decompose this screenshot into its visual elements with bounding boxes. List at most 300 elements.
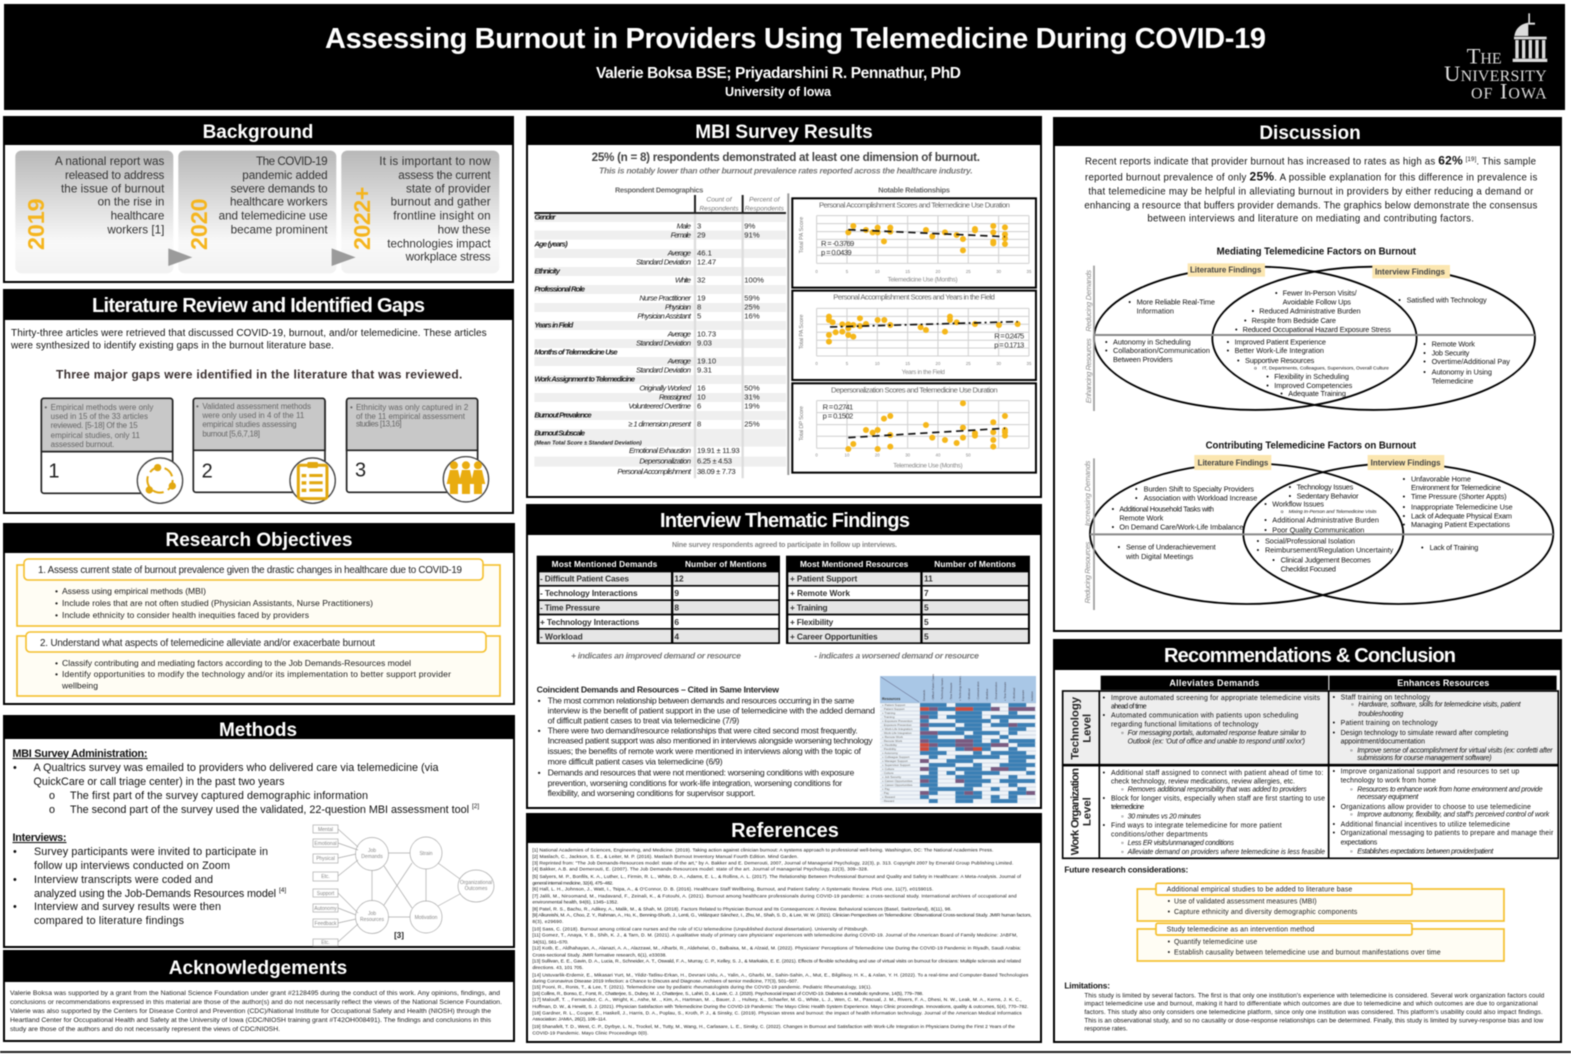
objective 2: Identify opportunities to modify the technology and/or its implementation to better support provider: [62, 669, 451, 679]
gap card 1: assessed burnout.: [51, 440, 114, 449]
venn items: Telemedicine: [1432, 376, 1473, 385]
step: 2022+: 2022+: [349, 187, 375, 250]
logo: University of Iowa: University: [1444, 61, 1547, 86]
table: respondent demographics: 9.03: [697, 339, 712, 348]
objective 2: 2. Understand what aspects of telemedicine alleviate and/or exacerbate burnout: [40, 638, 375, 649]
table: respondent demographics: Average: [667, 249, 691, 258]
heat map: demands by resources: + Work-Life Integration: [882, 727, 913, 731]
recommendations: work organization, enhances resources: Establishes expectations between provider/patient: [1357, 848, 1494, 855]
table: respondent demographics: 59%: [744, 294, 760, 303]
heat map: demands by resources: - Patient Support: [882, 707, 905, 711]
recommendations: technology, enhances resources: •: [1333, 694, 1336, 701]
table: respondent demographics: 8: [697, 303, 701, 312]
panel: recommendations and conclusion: [1054, 640, 1561, 1042]
MBI survey administration: o: [49, 804, 55, 816]
recommendations: work organization, enhances resources: Resources to enhance work from home environment and provide: [1357, 787, 1543, 794]
callout: study telemedicine as intervention: Study telemedicine as an intervention method: [1167, 927, 1314, 934]
table: most mentioned demands: - Technology Interactions: [540, 588, 638, 598]
coincident demands and resources text: interview is the benefit of patient support in the use of telemedicine with the added demand: [548, 705, 875, 715]
table: respondent demographics: Work Assignment to Telemedicine: [534, 375, 636, 384]
row label: work organization level: Work Organization: [1070, 768, 1082, 855]
literature text: Three major gaps were identified in the literature that was reviewed.: [56, 367, 462, 381]
step: 2022+: technologies impact: [387, 237, 491, 250]
table: respondent demographics: 9.31: [697, 366, 712, 375]
limitations: impact telemedicine use and burnout, making it hard to differentiate which outcomes are due to telemedicine and which outcomes are due to organizational: [1084, 1001, 1538, 1008]
diagram: job demands-resources model: Feedback: [315, 921, 337, 927]
icon: cycle: [137, 458, 183, 503]
table: most mentioned demands: - Difficult Patient Cases: [540, 574, 629, 584]
table: respondent demographics: [533, 186, 950, 478]
recommendations: technology, alleviates demands: •: [1103, 712, 1106, 719]
recommendations: work organization, alleviates demands: telemedicine: [1111, 804, 1144, 811]
discussion text: [1084, 153, 1537, 225]
table: respondent demographics: 25%: [744, 303, 760, 312]
heading: MBI survey results: MBI Survey Results: [695, 122, 873, 143]
venn items: Clinical Judgement Becomes: [1281, 556, 1371, 565]
recommendations: work organization, alleviates demands: conditions/other departments: [1111, 832, 1208, 839]
recommendations: work organization, enhances resources: [1333, 768, 1554, 855]
recommendations: technology, alleviates demands: •: [1103, 695, 1106, 702]
venn items: Fewer In-Person Visits/: [1283, 288, 1358, 297]
recommendations: work organization, alleviates demands: •: [1103, 796, 1106, 803]
heat map: demands by resources: + Exposure Prevention: [882, 719, 913, 723]
interviews: •: [13, 901, 17, 913]
venn items: o: [1254, 365, 1257, 371]
reference list: COVID-19 Pandemic. Mayo Clinic Proceedings 0(0).: [532, 1030, 648, 1036]
callout: study telemedicine as intervention: •: [1168, 949, 1171, 956]
table: respondent demographics: 50%: [744, 384, 760, 393]
step: 2019: the issue of burnout: [61, 183, 165, 196]
panel: acknowledgements: [4, 951, 514, 1041]
row label: technology level: Level: [1082, 714, 1094, 743]
interviews: Interview and survey results were then: [34, 901, 221, 913]
diagram: job demands-resources model: Job: [368, 848, 376, 854]
chart: depersonalization vs telemedicine duration: Depersonalization Scores and Telemedicine Use Duration: [831, 385, 998, 394]
table: respondent demographics: Male: [677, 221, 691, 230]
interviews: Interviews:: [12, 832, 66, 844]
table: most mentioned demands: [537, 556, 780, 644]
diagram: job demands-resources model: Support: [317, 891, 335, 897]
recommendations: technology, enhances resources: Staff training on technology: [1341, 694, 1430, 701]
coincident demands and resources text: [537, 685, 875, 798]
discussion text: reported burnout prevalence of only 25%. A possible explanation for this difference in prevalence is: [1085, 170, 1537, 184]
discussion text: that telemedicine may be helpful in alleviating burnout in providers by either reducing a demand or: [1088, 186, 1534, 197]
venn items: with Digital Meetings: [1125, 552, 1194, 561]
heading: discussion: Discussion: [1259, 123, 1361, 144]
venn items: Mixing In-Person and Telemedicine Visits: [1289, 509, 1377, 515]
reference list: [11] Gomez, T., Anaya, Y. B., Shih, K. J., & Tarn, D. M. (2021). A qualitative study of primary care physicians' experiences with telemedicine during COVID-19. Journal of the American Board of Family Medicine: JABFM,: [532, 933, 1018, 939]
venn items: •: [1237, 356, 1240, 365]
venn items: •: [1423, 339, 1426, 348]
chart: personal accomplishment vs years in field: 5: [846, 361, 849, 366]
step: 2022+: workplace stress: [405, 250, 491, 263]
panel: references: [527, 814, 1041, 1042]
venn items: •: [1112, 522, 1115, 531]
callout: additional empirical studies: •: [1168, 898, 1171, 905]
timeline steps: [15, 151, 499, 273]
heat map: demands by resources: + Flexibility: [882, 743, 897, 747]
venn items: [1105, 288, 1510, 398]
table: most mentioned resources: Number of Mentions: [934, 559, 1016, 569]
venn items: •: [1105, 337, 1108, 346]
heat map: demands by resources: - Flexibility: [882, 747, 897, 751]
venn items: Technology Issues: [1297, 482, 1354, 491]
heat map: demands by resources: + Career Opportunities: [882, 779, 913, 783]
venn items: •: [1257, 545, 1260, 554]
recommendations: work organization, alleviates demands: Block for longer visits, especially when staff are first starting to use: [1111, 796, 1325, 803]
discussion text: . This sample: [1476, 156, 1536, 167]
discussion text: between interviews and literature on mediating and contributing factors.: [1147, 214, 1474, 225]
legend notes: - indicates a worsened demand or resource: [814, 650, 979, 660]
step: 2019: on the rise in: [98, 196, 164, 209]
recommendations: technology, alleviates demands: ahead of time: [1111, 703, 1147, 710]
chart: depersonalization vs telemedicine duration: 20: [875, 453, 880, 458]
heat map: demands by resources: + Career Opportunities: [882, 783, 913, 787]
literature text: [10, 328, 487, 381]
reference list: 34(S1), S61–S70.: [532, 939, 568, 945]
table: most mentioned resources: + Remote Work: [790, 588, 850, 598]
venn items: Improved Patient Experience: [1235, 337, 1326, 346]
panel: methods: [4, 716, 514, 947]
recommendations table: Enhances Resources: [1397, 678, 1489, 688]
table: respondent demographics: Personal Accomplishment: [617, 467, 692, 476]
MBI survey administration: A Qualtrics survey was emailed to providers who delivered care via telemedicine (via: [34, 762, 438, 774]
panel: interview thematic findings: [527, 505, 1041, 808]
icon: people: [443, 457, 489, 502]
step: 2019: [23, 155, 165, 250]
heading: references: References: [731, 820, 839, 842]
row label: work organization level: Level: [1082, 797, 1094, 826]
MBI survey administration: o: [49, 790, 55, 802]
table: respondent demographics: Gender: [534, 212, 557, 221]
table: respondent demographics: 46.1: [697, 249, 712, 258]
venn items: Respite from Bedside Care: [1252, 316, 1336, 325]
venn items: •: [1266, 381, 1269, 390]
objective 1: •: [55, 610, 58, 620]
reference list: Association: JAMIA, 26(2), 106–114.: [532, 1017, 607, 1023]
venn items: IT, Departments, Colleagues, Supervisors, Overall Culture: [1262, 365, 1389, 371]
table: most mentioned resources: 11: [924, 574, 933, 584]
table: most mentioned resources: 5: [924, 631, 929, 641]
recommendations: work organization, enhances resources: ▫: [1350, 848, 1352, 855]
step: 2020: and telemedicine use: [219, 210, 328, 223]
reference list: [15] Pooni, R., Ronis, T., & Lee, T. (2021). Telemedicine use by pediatric rheumatologists during the COVID-19 pandemic. Pediatric Rheumatology, 19(1).: [532, 985, 872, 991]
reference list: [17] Malouff, T. ., Fernandez, C. A., Wright, K., Ashe, M. ., Kim, A., Hartman, M. ., Bauer, J. ., Hulsey, K., Schaefer, M. G., White, L. J., Wen, C. M., Pascual, J. M., Rivers, F. A., Dhesi, N. W., Leak, M. A., Kerns, J. K. C.,: [532, 997, 1022, 1003]
venn items: •: [1423, 348, 1426, 357]
chart: depersonalization vs telemedicine duration: 30: [905, 453, 911, 458]
venn items: Lack of Training: [1430, 543, 1478, 552]
heading: interview thematic findings: Interview Thematic Findings: [660, 510, 910, 532]
heading: research objectives: Research Objectives: [166, 530, 352, 551]
heat map: demands by resources: + Manager Support: [882, 759, 908, 763]
table: respondent demographics: 19.10: [697, 357, 716, 366]
venn items: •: [1403, 502, 1406, 511]
recommendations: work organization, alleviates demands: Less ER visits/unmanaged conditions: [1128, 840, 1234, 847]
table: most mentioned demands: 9: [674, 588, 679, 598]
chart: personal accomplishment vs years in field: 30: [996, 361, 1002, 366]
chart: personal accomplishment vs years in field: 25: [966, 361, 971, 366]
chart: depersonalization vs telemedicine duration: p = 0.1502: [823, 411, 853, 420]
literature text: were synthesized to identify existing gaps in the burnout literature base.: [10, 341, 334, 352]
interviews: compared to literature findings: [34, 915, 185, 927]
gap card 2: [193, 398, 335, 503]
venn items: •: [1135, 493, 1138, 502]
venn items: On Demand Care/Work-Life Imbalance: [1119, 522, 1243, 531]
table: respondent demographics: White: [675, 276, 691, 285]
recommendations: work organization, enhances resources: Additional financial incentives to utilize telemedicine: [1341, 822, 1510, 829]
venn items: Reduced Administrative Burden: [1259, 307, 1361, 316]
recommendations: work organization, alleviates demands: Removes additional responsibility that was added to providers: [1128, 787, 1307, 794]
gap card 3: [347, 398, 489, 502]
venn items: •: [1112, 505, 1115, 514]
gap card 1: •: [44, 403, 47, 412]
recommendations: work organization, alleviates demands: •: [1103, 770, 1106, 777]
reference list: [12] Kotb, E., Aldhahayan, A., Alanazi, A. A., Alazzawi, M., Alharbi, R., Aldeheiwi, O., Balbaisa, M., & Alzaid, M. (2022). Physicians' Perceptions of Telemedicine Use During the COVID-19 Pandemic in Riyadh, Saudi Arabia:: [532, 946, 1021, 952]
table: respondent demographics: Months of Telemedicine Use: [534, 348, 618, 357]
table: most mentioned demands: - Workload: [540, 631, 583, 641]
label: literature findings: [1194, 455, 1271, 470]
venn items: •: [1264, 500, 1267, 509]
authors: Valerie Boksa BSE; Priyadarshini R. Pennathur, PhD: [596, 65, 961, 82]
key finding: This is notably lower than other burnout prevalence rates reported across the healthcare industry.: [599, 165, 973, 175]
venn items: •: [1128, 297, 1131, 306]
heat map: demands by resources: - Communication: [976, 681, 980, 701]
recommendations: technology, enhances resources: Patient training on technology: [1341, 720, 1438, 727]
heat map: demands by resources: + Job Security: [882, 775, 902, 779]
table: respondent demographics: Count of: [706, 197, 733, 204]
legend notes: + indicates an improved demand or resource: [571, 650, 741, 660]
gap card 2: 2: [202, 461, 213, 483]
table: most mentioned resources: [786, 556, 1030, 644]
heading: recommendations and conclusion: Recommendations & Conclusion: [1164, 645, 1456, 667]
interviews: [4]: [279, 887, 286, 894]
objective 1: Include ethnicity to consider health inequities faced by providers: [62, 610, 309, 620]
reference list: during Coronavirus Disease 2019 Infection: a Chance to Discuss and Diagnose. Archives of senior medicine, 77(3), 501–507.: [532, 978, 798, 984]
coincident demands and resources text: The most common relationship between demands and resources occurring in the same: [548, 695, 854, 705]
venn items: Avoidable Follow Ups: [1283, 298, 1351, 307]
venn items: Satisfied with Technology: [1407, 295, 1487, 304]
callout: additional empirical studies: •: [1168, 909, 1171, 916]
gap card 1: used in 15 of the 33 articles: [51, 412, 148, 421]
limitations: This study is limited by several factors. The first is that only one institution's experience with telemedicine is considered. Several work organization factors could: [1084, 992, 1545, 999]
venn items: •: [1423, 367, 1426, 376]
table: respondent demographics: Respondent Demographics: [615, 186, 703, 195]
table: most mentioned resources: + Flexibility: [790, 617, 834, 627]
heat map: demands by resources: + Workload: [1012, 687, 1016, 701]
recommendations: technology, enhances resources: Improve sense of accomplishment for virtual visits (ex: confetti after: [1357, 748, 1553, 755]
label: literature findings: Literature Findings: [1190, 266, 1262, 275]
step: 2020: [186, 155, 328, 250]
heat map: demands by resources: + Remote Work: [882, 735, 903, 739]
step: 2020: severe demands to: [231, 183, 328, 196]
heat map: demands by resources: - Technology Issues: [940, 677, 944, 701]
venn items: [1112, 474, 1513, 574]
table: respondent demographics: Respondents: [699, 206, 739, 213]
chart: personal accomplishment vs years in field: Personal Accomplishment Scores and Years in the Field: [833, 293, 995, 302]
table: respondent demographics: Standard Deviation: [636, 366, 691, 375]
table: respondent demographics: 19: [697, 294, 706, 303]
recommendations: work organization, alleviates demands: •: [1103, 822, 1106, 829]
callout: study telemedicine as intervention: •: [1168, 939, 1171, 946]
heat map: demands by resources: + Technology Interact.: [958, 675, 962, 701]
heat map: demands by resources: + Pay: [882, 787, 890, 791]
chart: personal accomplishment vs telemedicine duration: 0: [815, 269, 818, 274]
step: 2022+: how these: [438, 224, 491, 237]
objective 1: •: [55, 598, 58, 608]
step: 2020: 2020: [186, 198, 212, 250]
step: 2020: pandemic added: [242, 169, 328, 182]
table: most mentioned resources: 5: [924, 617, 929, 627]
recommendations: work organization, enhances resources: necessary equipment: [1357, 794, 1419, 801]
venn items: •: [1244, 316, 1247, 325]
venn items: Environment for Telemedicine: [1411, 483, 1501, 492]
table: respondent demographics: 31%: [744, 393, 760, 402]
discussion text: [19]: [1466, 157, 1477, 163]
chart: depersonalization vs telemedicine duration: 0: [815, 453, 818, 458]
diagram: job demands-resources model: [3]: [394, 931, 404, 940]
callout: additional empirical studies: Additional empirical studies to be added to literature base: [1167, 887, 1352, 894]
objective 1: Assess using empirical methods (MBI): [62, 586, 206, 596]
interviews: Interview transcripts were coded and: [34, 874, 213, 886]
table: respondent demographics: Burnout Prevalence: [534, 411, 592, 420]
chart: personal accomplishment vs telemedicine duration: 5: [846, 269, 849, 274]
recommendations: work organization, alleviates demands: [1103, 770, 1325, 856]
table: respondent demographics: 3: [697, 221, 701, 230]
chart: personal accomplishment vs telemedicine duration: [792, 198, 1036, 288]
diagram: job demands-resources model: Motivation: [415, 915, 438, 921]
venn items: •: [1289, 491, 1292, 500]
gap card 2: •: [196, 402, 199, 411]
reference list: [16] Collins, R., Bonso, E., Forst, R., Chatterjee, S., Dubey, M. J., Chatterjee, S., Lahiri, D., & Lavie, C. J. (2020). Psychosocial impact of COVID-19. Diabetes & metabolic syndrome, 14(5), 779–788.: [532, 991, 923, 997]
recommendations: work organization, alleviates demands: ▫: [1121, 849, 1123, 856]
chart: personal accomplishment vs years in field: 20: [936, 361, 941, 366]
diagram: job demands-resources model: Physical: [316, 856, 335, 862]
table: respondent demographics: Originally Worked: [639, 384, 692, 393]
venn diagram: mediating telemedicine factors: Reducing Demands: [1084, 270, 1093, 332]
table: most mentioned resources: + Patient Support: [790, 574, 858, 584]
MBI survey administration: [2]: [472, 803, 479, 810]
recommendations: technology, enhances resources: submissions for course management software): [1357, 755, 1492, 762]
venn items: •: [1264, 516, 1267, 525]
acknowledgement text: Valerie was also supported by the Centers for Disease Control and Prevention (CDC)/National Institute for Occupational Safety and Health (NIOSH) through the: [10, 1008, 491, 1015]
step: 2020: healthcare workers: [230, 196, 328, 209]
venn items: Collaboration/Communication: [1113, 346, 1210, 355]
reference list: [8] Patel, R. S., Bachu, R., Adikey, A., Malik, M., & Shah, M. (2018). Factors Related to Physician Burnout and Its Consequences: A Review. Behavioral sciences (Basel, Switzerland), 8(11), 98.: [532, 906, 952, 912]
recommendations: work organization, alleviates demands: 30 minutes vs 20 minutes: [1128, 813, 1201, 820]
coincident demands and resources text: Demands and resources that were not mentioned: worsening conditions with exposure: [548, 768, 854, 778]
venn items: •: [1227, 346, 1230, 355]
coincident demands and resources text: issues; the benefits of remote work were mentioned in interviews along with the topic of: [548, 746, 862, 756]
table: respondent demographics: 25%: [744, 420, 760, 429]
acknowledgement text: Heartland Center for Occupational Health and Safety at the University of Iowa (CDC/NIOSH training grant #T42OH008491). The findings and conclusions in this: [10, 1017, 492, 1024]
chart: depersonalization vs telemedicine duration: 10: [845, 453, 850, 458]
interviews: follow up interviews conducted on Zoom: [34, 860, 230, 872]
discussion text: enhancing a resource that buffers provider demands. The graphics below demonstrate the consensus: [1084, 200, 1537, 211]
limitations: This is an observational study, and so no causality or dose-response relationships can be determined. Finally, this study is limited by survey-response bias and low: [1084, 1017, 1544, 1024]
recommendations: work organization, enhances resources: Organizations allow provider to choose to use telemedicine: [1341, 804, 1531, 811]
interviews: •: [13, 846, 17, 858]
diagram: job demands-resources model: Resources: [360, 917, 384, 923]
header banner: [4, 4, 1565, 110]
label: interview findings: [1372, 265, 1450, 278]
reference list: [9] Alkureishi, M. A., Choo, Z. Y., Rahman, A., Ho, K., Benning-Shorb, J., Lenti, G., Velázquez Sánchez, I., Zhu, M., Shah, S. D., & Lee, W. W. (2021). Clinician Perspectives on Telemedicine: Observational Cross-sectional Study. JMIR human factors,: [532, 913, 1032, 919]
panel: research objectives: [4, 524, 514, 704]
MBI survey administration: •: [13, 762, 17, 774]
acknowledgement text: [10, 990, 502, 1033]
logo: University of Iowa: of Iowa: [1471, 78, 1547, 103]
reference list: [3] Reprinted from: "The Job Demands-Resources model: state of the art," by A. Bakker and E. Demerouti, 2007, Journal of Managerial Psychology, 22(3), p. 313. Copyright 2007 by Emerald Group Publishing Limited.: [532, 860, 1013, 866]
heat map: demands by resources: - Exposure Prevention: [882, 723, 912, 727]
heat map: demands by resources: + Supervisor Support: [882, 763, 910, 767]
reference list: [532, 847, 1032, 1036]
chart: depersonalization vs telemedicine duration: Total DP Score: [799, 406, 805, 441]
recommendations: work organization, enhances resources: Improve autonomy, flexibility, and staff's perceived control of work: [1357, 812, 1550, 819]
recommendations: technology, enhances resources: [1333, 694, 1553, 762]
venn items: Sedentary Behavior: [1297, 491, 1359, 500]
venn items: •: [1398, 295, 1401, 304]
venn items: Unfavorable Home: [1411, 474, 1471, 483]
coincident demands and resources text: •: [538, 726, 541, 736]
table: respondent demographics: Average: [667, 330, 691, 339]
heat map: demands by resources: - Time Pressure: [949, 682, 953, 701]
chart: personal accomplishment vs telemedicine duration: 15: [905, 269, 911, 274]
heat map: demands by resources: + Training: [882, 711, 896, 715]
heat map: demands by resources: - Workflow: [985, 689, 989, 701]
reference list: [5] Salyers, M. P., Bonfils, K. A., Luther, L., Firmin, R. L., White, D. A., Adams, E. L., & Rollins, A. L. (2017). The Relationship Between Professional Burnout and Quality and Safety in Healthcare: A Meta-Analysis. Journal of: [532, 874, 1022, 880]
heading: literature review: Literature Review and Identified Gaps: [92, 295, 425, 317]
venn items: •: [1403, 492, 1406, 501]
coincident demands and resources text: Increased patient support was also mentioned in interviews alongside worsening technology: [548, 736, 873, 746]
venn items: Additional Household Tasks with: [1119, 505, 1214, 514]
heading: methods: Methods: [219, 720, 297, 741]
interviews: analyzed using the Job-Demands Resources model: [34, 888, 276, 900]
objective 2: wellbeing: [61, 680, 98, 690]
objective 1: [17, 559, 500, 626]
recommendations: work organization, enhances resources: ▫: [1350, 812, 1352, 819]
table: respondent demographics: 10: [697, 393, 706, 402]
recommendations: work organization, enhances resources: ▫: [1350, 787, 1352, 794]
objective 2: •: [55, 669, 58, 679]
gap card 3: of the 11 empirical assessment: [356, 412, 466, 421]
gap card 1: 1: [48, 461, 59, 483]
table: respondent demographics: Physician: [665, 303, 691, 312]
table: respondent demographics: Emotional Exhaustion: [629, 446, 691, 455]
table: most mentioned resources: 7: [924, 588, 929, 598]
callout: study telemedicine as intervention: Quantify telemedicine use: [1174, 939, 1257, 946]
venn items: •: [1403, 520, 1406, 529]
objective 1: 1. Assess current state of burnout prevalence given the drastic changes in healthcare due to COVID-19: [38, 565, 462, 576]
diagram: job demands-resources model: Outcomes: [465, 886, 488, 892]
venn items: Remote Work: [1432, 339, 1475, 348]
chart: personal accomplishment vs years in field: R = 0.2475: [994, 331, 1024, 340]
table: respondent demographics: Nurse Practitioner: [639, 294, 691, 303]
label: interview findings: [1368, 455, 1444, 470]
reference list: general internal medicine, 32(4), 475–482.: [532, 880, 613, 886]
reference list: [13] Sullivan, E. E., Gavin, D. A., Lucia, R., Schneider, A. T., Oswald, F. A., Murray, C. P., Kelley, S. J., & Markakis, E. E. (2021). Effects of flexible scheduling and use of virtual visits on burnout for clinicians: Multiple sclerosis and related: [532, 959, 1021, 965]
reference list: Cross-sectional Study. JMIR formative research, 6(1), e33038.: [532, 952, 667, 958]
gap card 1: [41, 398, 183, 503]
venn items: Autonomy in Using: [1432, 367, 1492, 376]
table: respondent demographics: 16: [697, 384, 706, 393]
venn items: Flexibility in Scheduling: [1274, 372, 1349, 381]
label: interview findings: Interview Findings: [1371, 459, 1441, 468]
future research considerations: Future research considerations:: [1064, 865, 1188, 875]
venn items: Reduced Occupational Hazard Exposure Stress: [1243, 325, 1391, 334]
table: respondent demographics: (Mean Total Score ± Standard Deviation): [534, 440, 642, 446]
MBI survey administration: The first part of the survey captured demographic information: [70, 790, 368, 802]
callout: additional empirical studies: Use of validated assessment measures (MBI): [1174, 898, 1317, 905]
panel: discussion: [1054, 118, 1561, 631]
